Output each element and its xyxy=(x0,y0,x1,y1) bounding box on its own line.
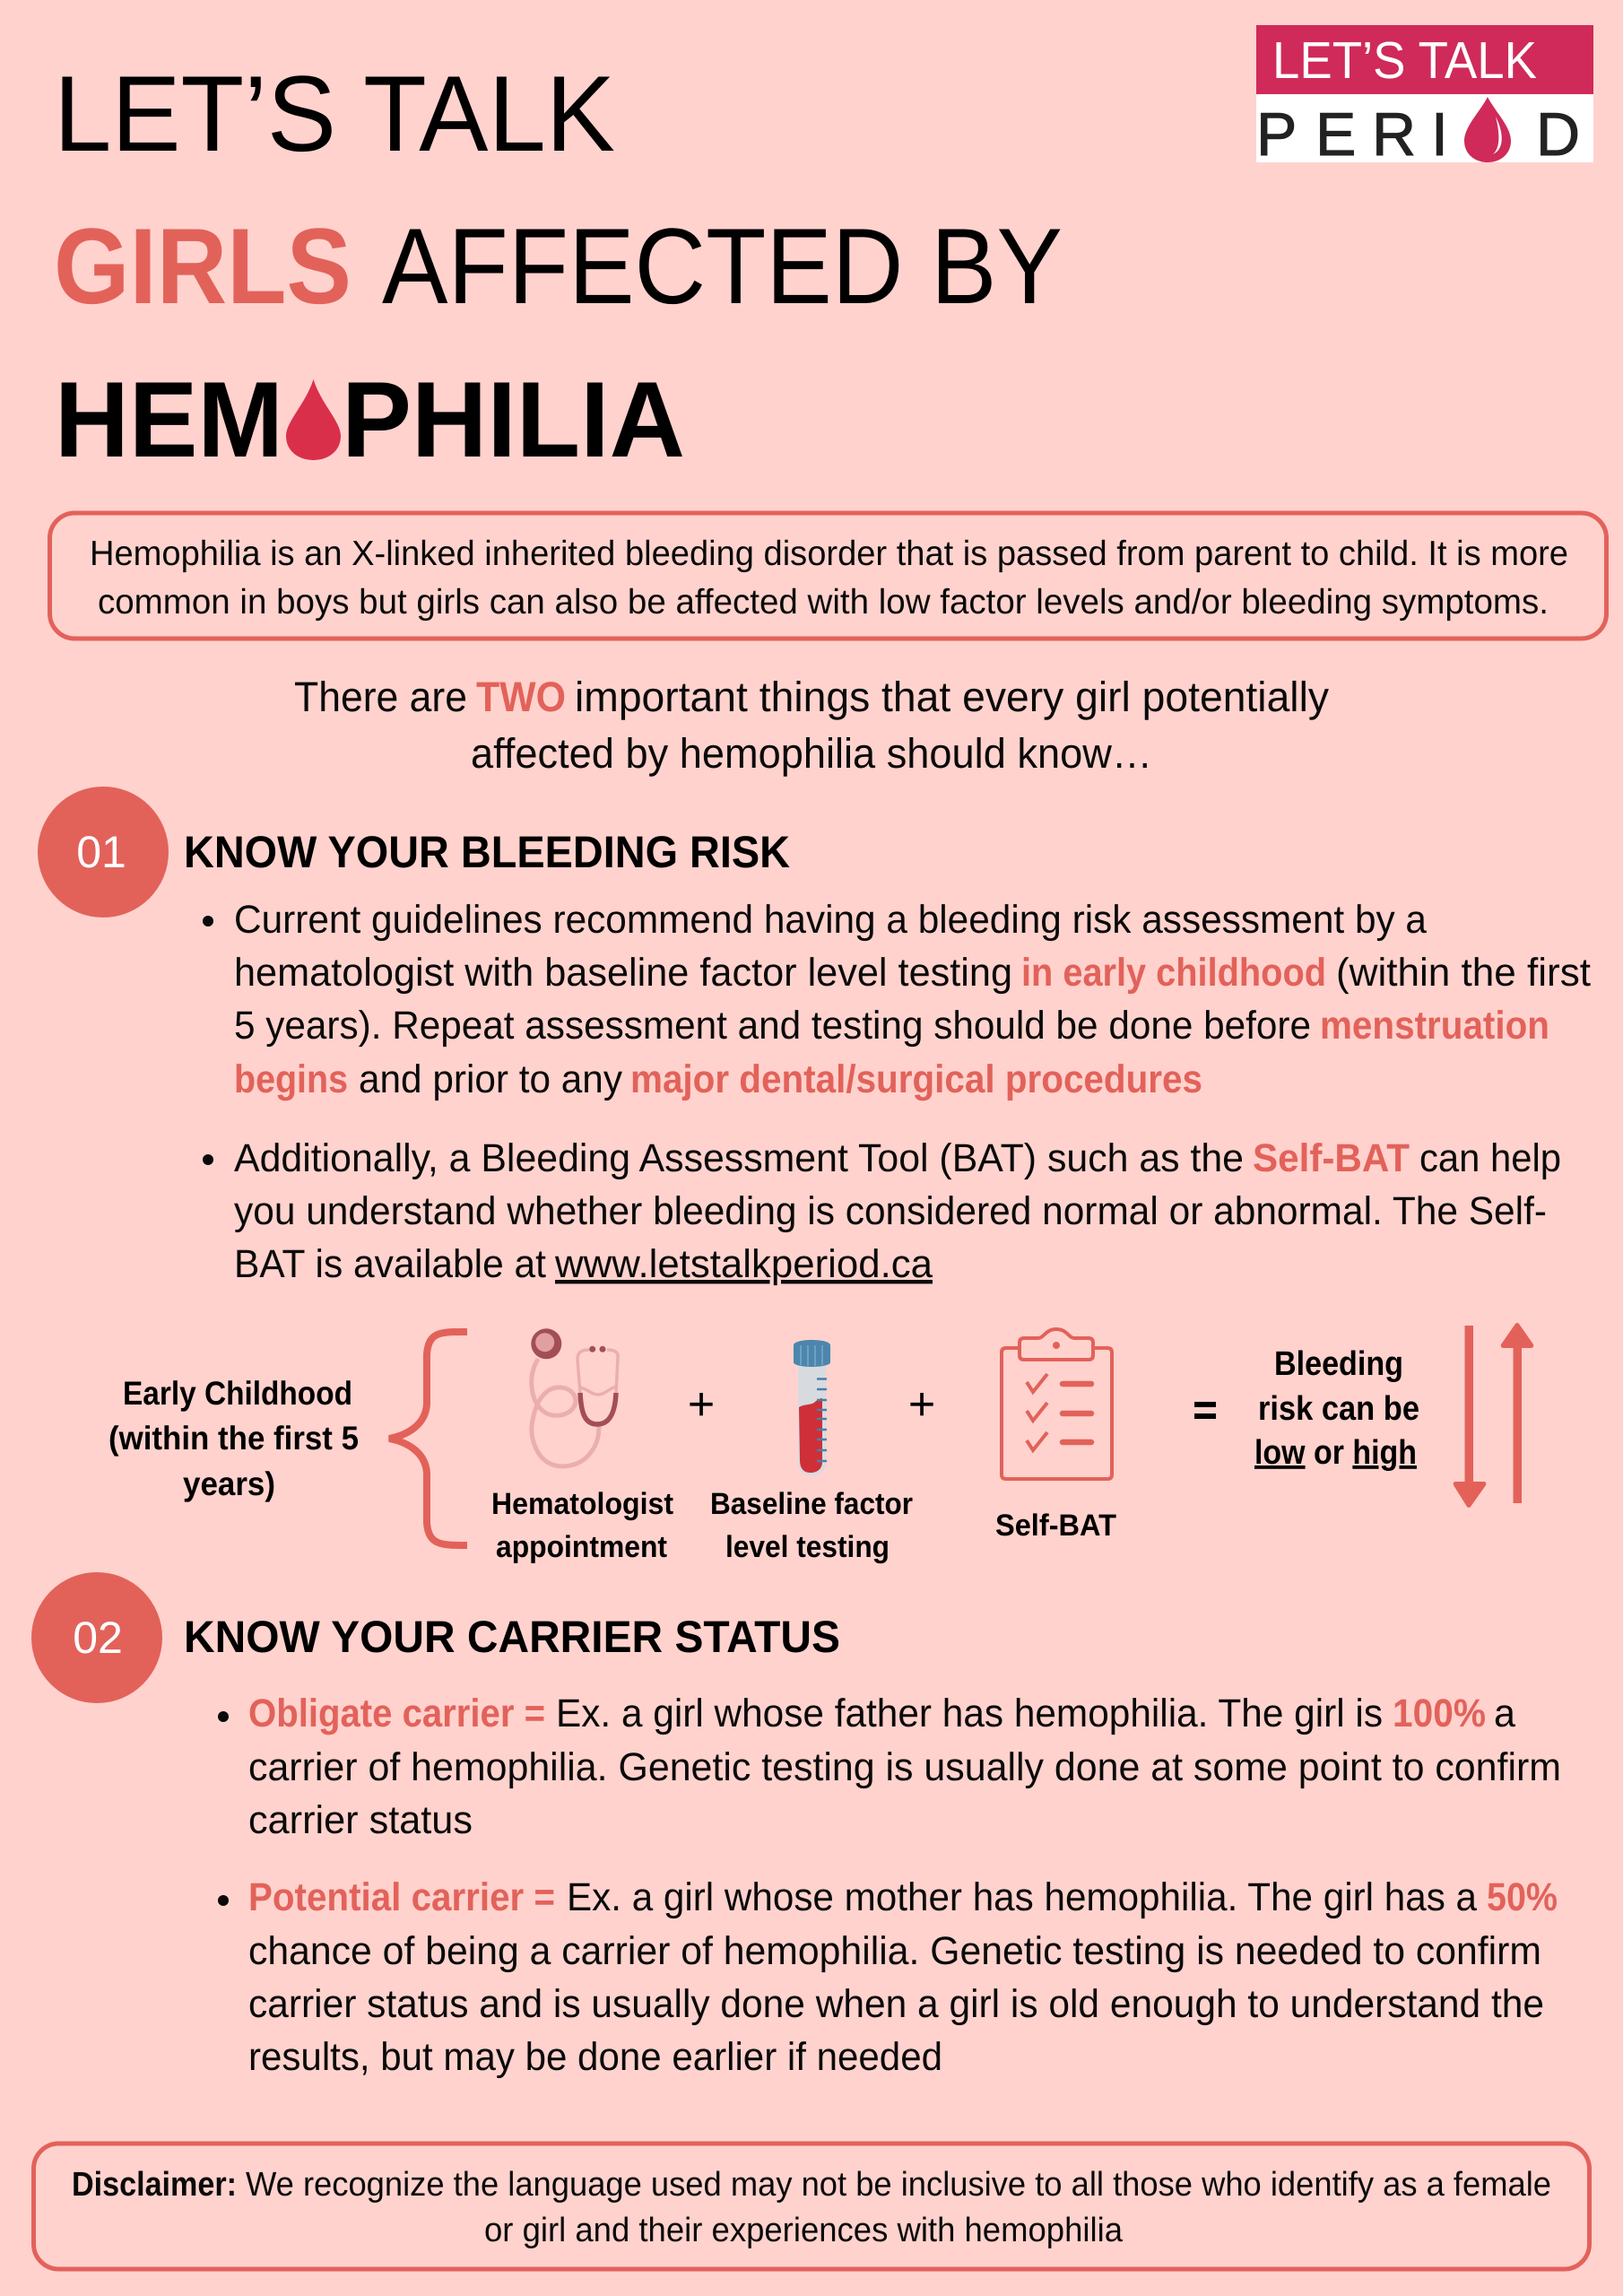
section 01 bullet: Self-BAT: can help xyxy=(1419,1136,1561,1180)
early childhood label xyxy=(108,1375,359,1502)
icon: clipboard xyxy=(1002,1329,1112,1479)
section 01 heading xyxy=(38,787,790,918)
logo: Let's Talk Period xyxy=(1256,25,1593,169)
section 01 heading: 01 xyxy=(76,827,126,877)
section 01 bullet: guidelines: Current guidelines recommend having a bleeding risk assessment by a xyxy=(234,898,1427,942)
section 01 bullet: Self-BAT: you understand whether bleeding is considered normal or abnormal. The Self- xyxy=(234,1189,1547,1233)
section 02 heading xyxy=(31,1572,840,1703)
section 02 bullet: potential carrier: Ex. a girl whose mother has hemophilia. The girl has a xyxy=(567,1875,1478,1919)
equals xyxy=(1194,1402,1216,1419)
panel: definition: common in boys but girls can also be affected with low factor levels and/or bleeding symptoms. xyxy=(98,583,1549,622)
section 02 bullet: potential carrier: 50% xyxy=(1487,1875,1558,1919)
bleeding risk result: Bleeding xyxy=(1274,1345,1403,1383)
intro text: TWO xyxy=(476,673,566,720)
section 01 bullet: guidelines: hematologist with baseline factor level testing xyxy=(234,951,1012,995)
section 01 bullet: guidelines: and prior to any xyxy=(359,1057,622,1101)
caption: Self-BAT: Self-BAT xyxy=(995,1509,1116,1543)
panel: definition: Hemophilia is an X-linked inherited bleeding disorder that is passed from parent to child. It is more xyxy=(90,535,1568,573)
title: LET’S TALK xyxy=(54,54,615,174)
early childhood label: Early Childhood xyxy=(123,1375,352,1412)
icon: stethoscope xyxy=(531,1328,618,1466)
section 02 bullet: potential carrier xyxy=(218,1875,1558,2079)
curly bracket xyxy=(389,1332,467,1545)
section 02 bullet: potential carrier: Potential carrier = xyxy=(248,1875,555,1919)
title: PHILIA xyxy=(342,360,685,480)
section 02 bullet: obligate carrier: carrier status xyxy=(248,1798,473,1842)
section 01 bullet: Self-BAT xyxy=(203,1136,1561,1286)
section 01 bullet: guidelines: menstruation xyxy=(1320,1004,1549,1048)
panel: definition xyxy=(50,513,1607,639)
plus: + xyxy=(688,1378,715,1431)
section 02 bullet: obligate carrier xyxy=(218,1692,1561,1842)
caption: baseline factor: Baseline factor xyxy=(710,1487,913,1521)
section 02 bullet: obligate carrier: Obligate carrier = xyxy=(248,1692,545,1735)
early childhood label: (within the first 5 xyxy=(108,1420,359,1457)
diagram: bleeding risk equation xyxy=(108,1323,1533,1564)
section 02 bullet: potential carrier: results, but may be done earlier if needed xyxy=(248,2035,942,2079)
section 01 bullet: guidelines: (within the first xyxy=(1336,951,1591,995)
panel: disclaimer xyxy=(34,2144,1589,2269)
bleeding risk result xyxy=(1254,1345,1419,1472)
section 02 bullet: obligate carrier: a xyxy=(1494,1692,1516,1735)
section 01 bullet: guidelines: begins xyxy=(234,1057,348,1101)
logo: Let's Talk Period: PERI xyxy=(1256,100,1448,169)
logo: Let's Talk Period: D xyxy=(1536,100,1580,169)
title: GIRLS xyxy=(54,206,352,326)
section 01 bullet: guidelines: in early childhood xyxy=(1021,951,1326,995)
panel: disclaimer: or girl and their experiences with hemophilia xyxy=(484,2212,1124,2249)
section 01 bullet: guidelines xyxy=(203,898,1591,1101)
plus: + xyxy=(908,1378,935,1431)
caption: hematologist: Hematologist xyxy=(491,1487,673,1521)
icon: test tube xyxy=(794,1340,830,1475)
section 02 heading: 02 xyxy=(73,1613,123,1663)
section 02 bullet: obligate carrier: carrier of hemophilia. Genetic testing is usually done at some point to confirm xyxy=(248,1745,1561,1789)
bleeding risk result: risk can be xyxy=(1258,1390,1419,1428)
intro text: affected by hemophilia should know… xyxy=(471,729,1152,777)
title xyxy=(54,54,1063,480)
arrow: down xyxy=(1454,1326,1486,1508)
panel: disclaimer: We recognize the language used may not be inclusive to all those who identify as a female xyxy=(246,2166,1551,2204)
logo: Let's Talk Period: LET’S TALK xyxy=(1272,31,1537,90)
section 01 bullet: Self-BAT: www.letstalkperiod.ca xyxy=(554,1242,933,1286)
section 02 bullet: potential carrier: carrier status and is usually done when a girl is old enough to understand the xyxy=(248,1982,1544,2026)
section 02 bullet: obligate carrier: Ex. a girl whose father has hemophilia. The girl is xyxy=(556,1692,1383,1735)
section 01 bullet: Self-BAT: Self-BAT xyxy=(1253,1136,1410,1180)
title: HEM xyxy=(55,360,283,480)
section 01 heading: KNOW YOUR BLEEDING RISK xyxy=(184,827,790,877)
arrow: up xyxy=(1501,1323,1533,1503)
bleeding risk result: low or high xyxy=(1254,1434,1417,1472)
section 02 bullet: obligate carrier: 100% xyxy=(1393,1692,1486,1735)
title: AFFECTED BY xyxy=(382,206,1063,326)
caption: baseline factor xyxy=(710,1487,913,1564)
early childhood label: years) xyxy=(183,1465,275,1502)
section 01 bullet: guidelines: major dental/surgical procedures xyxy=(630,1057,1202,1101)
intro text xyxy=(294,673,1329,777)
caption: hematologist xyxy=(491,1487,673,1564)
section 02 bullet: potential carrier: chance of being a carrier of hemophilia. Genetic testing is needed to confirm xyxy=(248,1929,1541,1973)
section 02 heading: KNOW YOUR CARRIER STATUS xyxy=(184,1612,840,1662)
panel: disclaimer: Disclaimer: xyxy=(72,2166,237,2204)
intro text: There are xyxy=(294,673,467,720)
section 01 bullet: Self-BAT: BAT is available at xyxy=(234,1242,546,1286)
section 01 bullet: guidelines: 5 years). Repeat assessment and testing should be done before xyxy=(234,1004,1311,1048)
caption: hematologist: appointment xyxy=(496,1530,667,1564)
caption: baseline factor: level testing xyxy=(725,1530,890,1564)
intro text: important things that every girl potentially xyxy=(575,673,1329,720)
section 01 bullet: Self-BAT: Additionally, a Bleeding Assessment Tool (BAT) such as the xyxy=(234,1136,1244,1180)
